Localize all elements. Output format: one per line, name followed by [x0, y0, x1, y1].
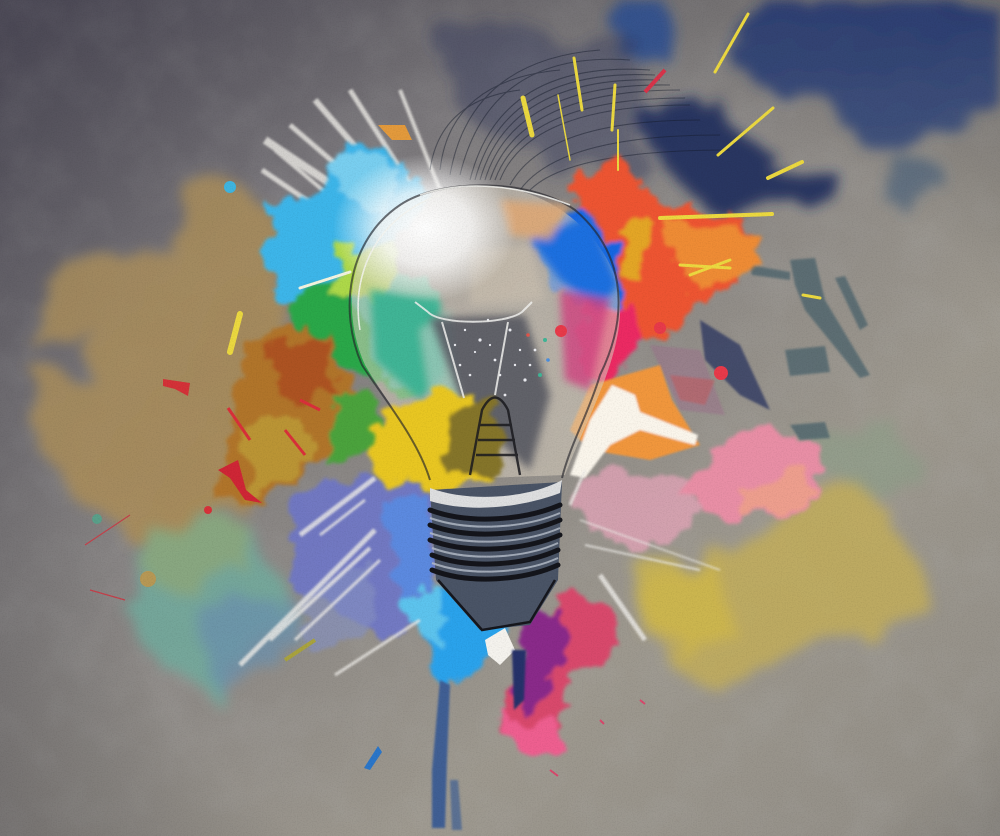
fine dark hatching rays, top of bulb: [430, 50, 730, 190]
burst of white rays, top left of bulb: [262, 90, 440, 250]
pink paint patch, right: [575, 420, 825, 550]
drips below bulb: [432, 650, 526, 830]
yellow paint patch, bottom right: [630, 420, 925, 686]
navy ink wash, top right: [430, 0, 1000, 215]
bulb speckles: [454, 319, 550, 396]
paint splash: orange and white, lower right of bulb: [570, 365, 700, 478]
yellow paint flecks, top: [230, 14, 820, 352]
paint splash: magenta and pink, below right of bulb: [495, 590, 620, 755]
bulb glass tint: [430, 315, 550, 470]
bulb glass fill: [352, 185, 620, 480]
ochre paint patch, left: [18, 165, 330, 552]
bulb outline: [350, 185, 619, 480]
teal and green paint patch, bottom left: [137, 520, 300, 695]
dark grey paint streaks, right: [650, 258, 870, 440]
paint splash: red, orange and blue, right of bulb: [530, 165, 765, 400]
bulb glass colour: cyan and green reflections: [370, 200, 618, 400]
paint splash: orange and brown, left of bulb: [215, 320, 390, 500]
small paint drops: [85, 70, 728, 776]
bulb glow: [333, 154, 517, 302]
white rays, lower left and right of bulb: [240, 470, 720, 675]
paint splash: blue and violet, lower left of bulb: [290, 475, 510, 690]
paint splash: cyan, upper left of bulb: [265, 145, 430, 300]
paint splash: yellow, inside base of bulb: [365, 390, 510, 490]
filament: [415, 302, 532, 398]
bulb inner highlight: [358, 186, 570, 330]
screw base: [430, 480, 562, 665]
paint splash: green, left of bulb: [285, 240, 440, 400]
bulb: [333, 154, 620, 665]
